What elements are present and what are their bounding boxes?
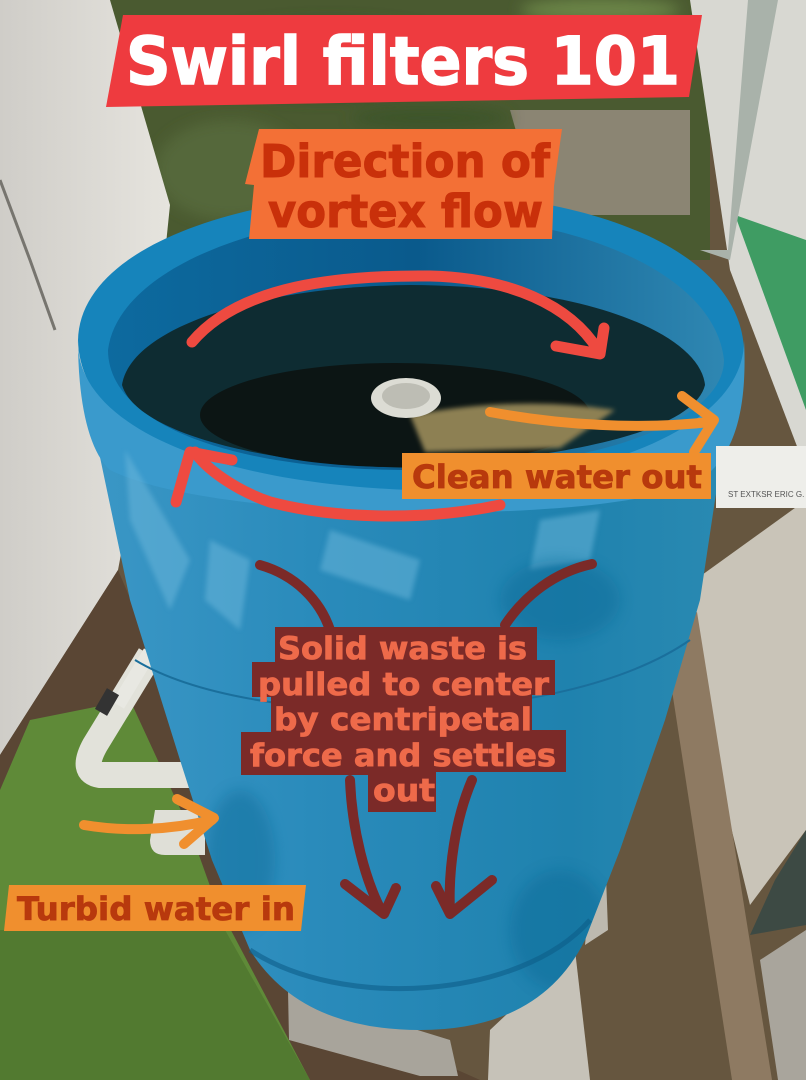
- label: clean water out: Clean water out: [412, 458, 702, 496]
- label: solid waste: Solid waste is: [278, 631, 527, 667]
- pipe: clean water outlet: [716, 446, 806, 508]
- shadow patches on barrel: [205, 560, 620, 990]
- label: solid waste: by centripetal: [274, 702, 532, 738]
- water surface: [122, 285, 705, 468]
- label: turbid water in: Turbid water in: [17, 890, 295, 928]
- concrete blocks: [288, 990, 458, 1076]
- arrow: vortex flow top: [192, 276, 604, 354]
- center standpipe: [371, 378, 441, 418]
- light patches: [125, 450, 600, 630]
- arrows: solid waste to center: [260, 564, 592, 914]
- pipe: inlet plumbing: [89, 652, 205, 855]
- arrow: vortex flow bottom: [176, 452, 500, 516]
- arrow: clean water out: [490, 396, 714, 452]
- title banner: Swirl filters 101: [126, 23, 680, 100]
- barrel rim: [78, 340, 745, 513]
- label: solid waste: out: [373, 773, 435, 809]
- arrow: turbid water in: [84, 799, 214, 844]
- barrel: [78, 192, 745, 1030]
- soil: [0, 570, 480, 1080]
- label: solid waste: [241, 627, 566, 812]
- label: direction of vortex flow: vortex flow: [268, 185, 543, 238]
- grass: [0, 700, 310, 1080]
- barrel body: [88, 400, 730, 1030]
- pipe: clean water outlet: ST EXTKSR ERIC G.: [728, 490, 804, 499]
- label: solid waste: force and settles: [250, 738, 556, 774]
- right structure: [690, 0, 806, 470]
- label: direction of vortex flow: Direction of: [260, 135, 550, 188]
- wall left: [0, 0, 170, 755]
- barrel inner wall: [78, 192, 744, 492]
- label: direction of vortex flow: [245, 129, 562, 239]
- label: solid waste: pulled to center: [258, 667, 550, 703]
